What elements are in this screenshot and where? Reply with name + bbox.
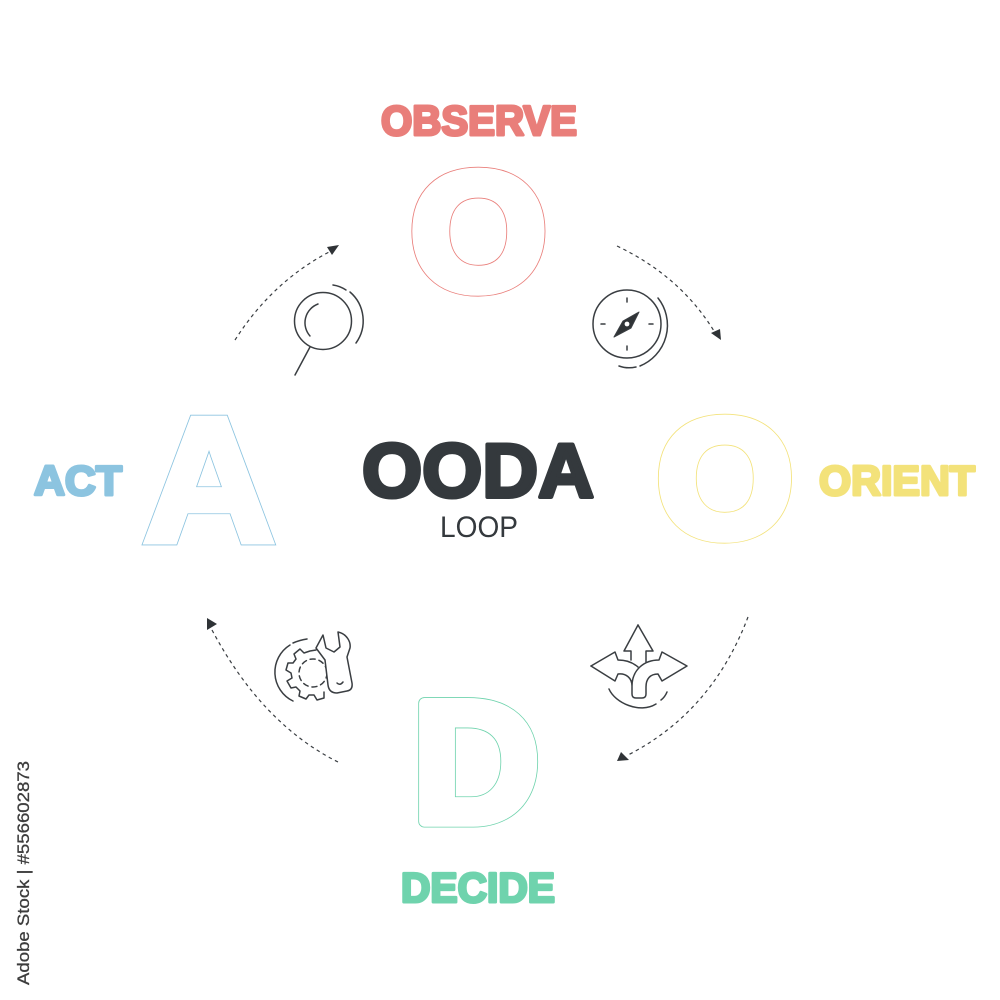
icon: compass <box>593 290 667 368</box>
heading: observe: OBSERVE <box>381 97 577 144</box>
letter: O observe: O <box>411 139 546 324</box>
letter: D decide: D <box>413 666 539 858</box>
letter: D decide: D <box>413 666 539 858</box>
arrow: observe to orient <box>617 246 721 340</box>
credit: stock id: Adobe Stock | #556602873 <box>14 761 33 985</box>
icon: gear and wrench <box>275 632 352 701</box>
title: OODA: OODA <box>362 429 594 514</box>
heading: orient: ORIENT <box>819 457 975 504</box>
arrow: act to observe <box>235 245 339 340</box>
letter: O orient: O <box>658 386 792 571</box>
arrow: orient to decide <box>617 617 748 761</box>
arrow: decide to act <box>207 618 338 762</box>
heading: act: ACT <box>34 457 122 504</box>
heading: decide: DECIDE <box>401 864 555 911</box>
icon: magnifying glass <box>294 285 363 375</box>
letter: O orient: O <box>658 386 792 571</box>
letter: O observe: O <box>411 139 546 324</box>
subtitle: LOOP: LOOP <box>440 511 518 544</box>
letter: A act: A <box>143 381 275 579</box>
icon: branching arrows <box>591 625 687 708</box>
letter: A act: A <box>143 381 275 579</box>
